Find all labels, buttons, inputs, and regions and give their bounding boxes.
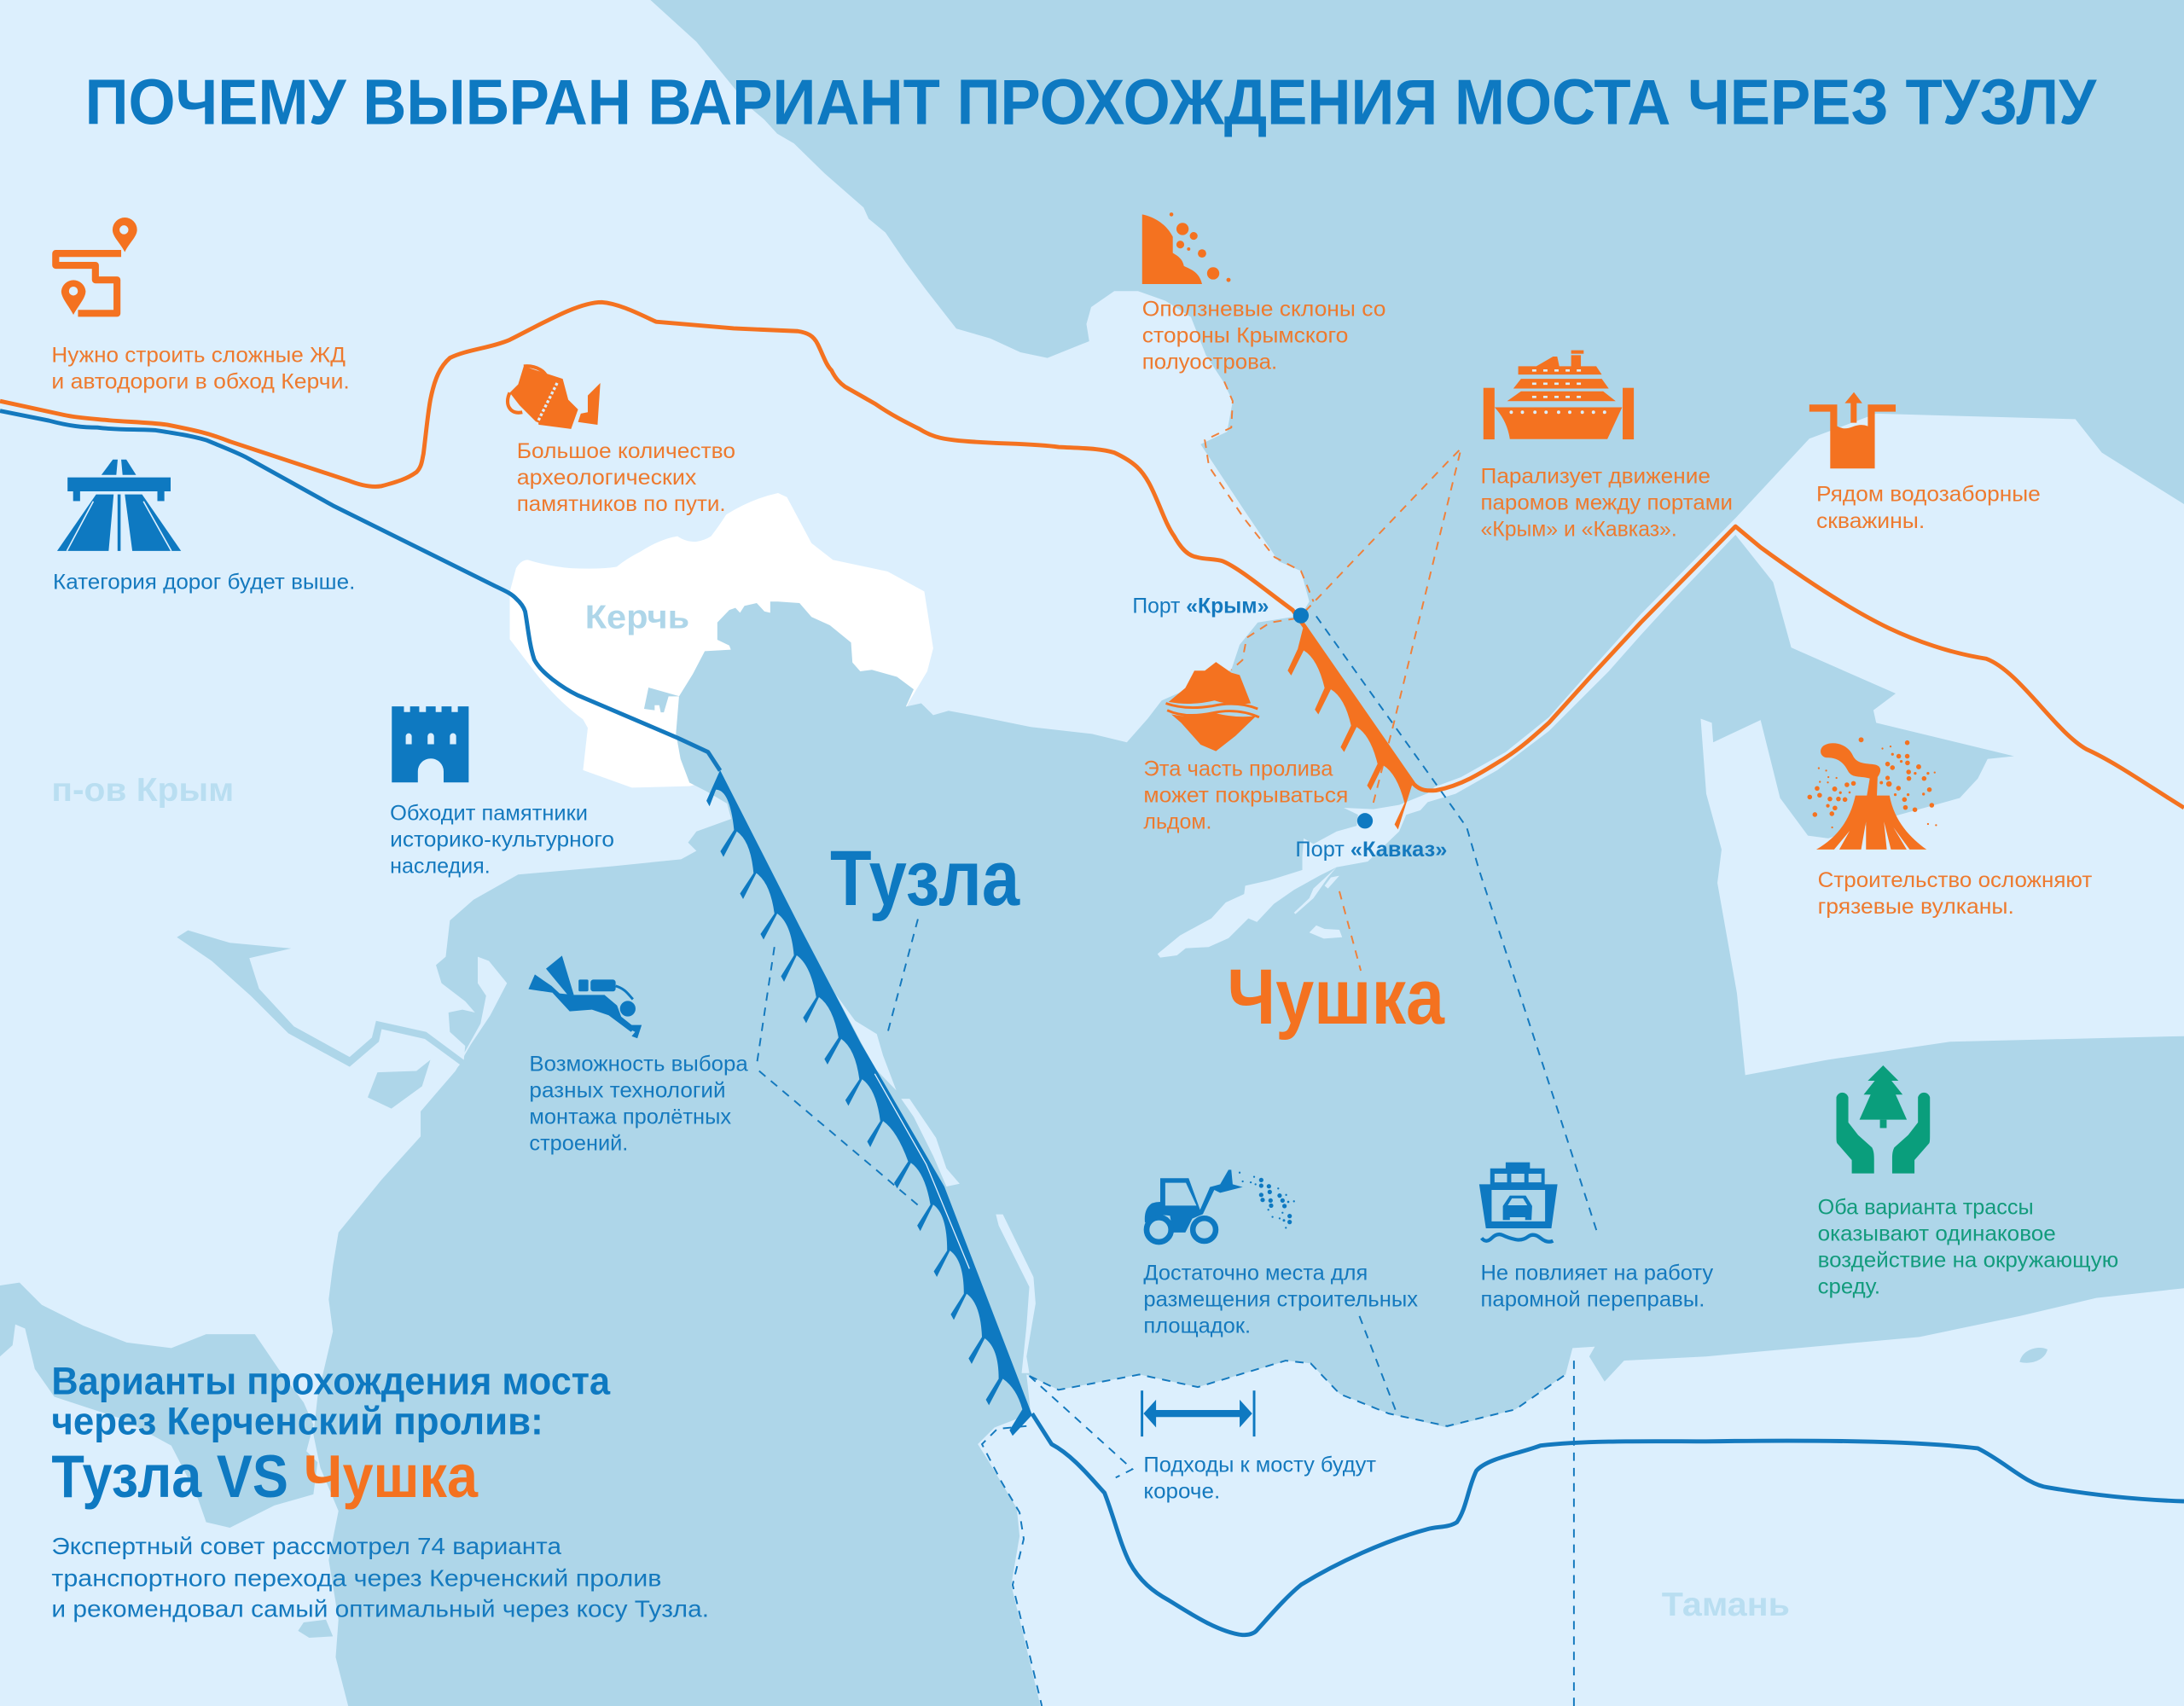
map: western lagoons [0,931,464,1638]
text: environment: оказывают одинаковое [1818,1222,2056,1246]
text: landslide: Оползневые склоны со [1142,298,1385,322]
text: heritage: Обходит памятники [390,802,588,826]
text: ice: Эта часть пролива [1143,757,1333,780]
text: complex roads: и автодороги в обход Керчи. [51,370,350,394]
text: landslide: стороны Крымского [1142,324,1348,348]
text: expert council: и рекомендовал самый оптимальный через косу Тузла. [51,1596,709,1622]
text: ferry crossing [1481,1261,1714,1311]
text: wells: Рядом водозаборные [1816,483,2041,507]
text: heritage [390,802,614,879]
icon: castle [392,706,468,782]
text: expert council [51,1533,709,1622]
text: approaches: Подходы к мосту будут [1143,1454,1376,1477]
text: diving technologies: монтажа пролётных [529,1105,731,1129]
text: environment: среду. [1818,1275,1880,1299]
text: ice [1143,757,1348,833]
port dots [1293,607,1373,828]
map: spits near Tuzla and Crimea [397,957,1036,1373]
text: ferry crossing: паромной переправы. [1481,1287,1705,1311]
text: landslide [1142,298,1385,374]
icon: hands and tree [1836,1065,1930,1174]
text: diving technologies: разных технологий [529,1079,726,1103]
text: archaeology: памятников по пути. [517,492,726,516]
text: diving technologies [529,1053,749,1156]
text: ferries: «Крым» и «Кавказ». [1481,518,1677,542]
text: ice: может покрываться [1143,783,1348,807]
label: Chushka: Чушка [1227,954,1445,1041]
text: construction sites [1143,1261,1418,1338]
text: construction sites: Достаточно места для [1143,1261,1368,1285]
text: road category: Категория дорог будет выше. [53,571,355,595]
text: ice: льдом. [1143,809,1211,833]
text: landslide: полуострова. [1142,351,1277,374]
text: diving technologies: Возможность выбора [529,1053,749,1076]
map: Kerch port basin [644,688,680,712]
icon: mud volcano [1808,737,1937,850]
icon: car ferry [1479,1163,1558,1242]
text: archaeology [517,439,735,516]
label: port Krym: Порт «Крым» [1132,594,1269,618]
label: Taman: Тамань [1662,1587,1790,1623]
text: approaches: короче. [1143,1480,1220,1504]
icon: highway [57,460,181,551]
text: heritage: наследия. [390,855,491,879]
text: environment: воздействие на окружающую [1818,1249,2118,1273]
heading: Tuzla VS Chushka: Тузла VS [51,1442,288,1510]
heading: bridge options: Варианты прохождения моста [51,1359,611,1402]
label: Tuzla: Тузла [830,835,1020,922]
map: small sea inlet on Taman coast [2019,1348,2048,1363]
icon: diver [528,955,642,1038]
text: construction sites: размещения строительных [1143,1287,1418,1311]
heading: Tuzla VS Chushka [51,1442,479,1510]
map: Taman north land and Chushka spit [1158,414,2184,1075]
text: ferry crossing: Не повлияет на работу [1481,1261,1714,1285]
text: wells: скважины. [1816,509,1925,533]
text: mud volcanoes [1818,868,2093,919]
text: expert council: транспортного перехода через Керченский пролив [51,1565,662,1592]
text: ferries: паромов между портами [1481,491,1733,515]
text: archaeology: Большое количество [517,439,735,463]
Tuzla bridge [706,770,1032,1436]
dashed leader lines [757,381,1598,1706]
Chushka bridge [1287,625,1413,829]
icon: iceberg [1166,662,1259,751]
text: mud volcanoes: грязевые вулканы. [1818,895,2014,919]
heading: Tuzla VS Chushka: Чушка [304,1442,479,1510]
text: heritage: историко-культурного [390,828,614,852]
icon: width arrow [1141,1390,1256,1436]
text: expert council: Экспертный совет рассмотрел 74 варианта [51,1533,562,1559]
blue route: Tuzla variant [0,411,2184,1635]
text: construction sites: площадок. [1143,1314,1251,1338]
text: mud volcanoes: Строительство осложняют [1818,868,2093,892]
icon: cruise ship [1484,351,1634,439]
text: archaeology: археологических [517,466,697,490]
icon: route with pins [55,218,137,315]
icon: landslide [1142,212,1230,284]
heading: bridge options: через Керченский пролив: [51,1400,543,1443]
heading: bridge options [51,1359,611,1443]
text: approaches [1143,1454,1376,1504]
map: Taman south land [978,1288,2184,1706]
text: complex roads [51,343,350,394]
text: ferries: Парализует движение [1481,465,1711,489]
text: ferries [1481,465,1733,542]
icon: tractor [1145,1169,1295,1242]
text: environment [1818,1196,2118,1299]
icon: water well [1809,392,1896,468]
orange route: Chushka variant [0,302,2184,808]
text: complex roads: Нужно строить сложные ЖД [51,343,346,367]
map: Chushka slivers [1294,868,1342,938]
label: Kerch: Керчь [585,599,689,635]
label: Crimea: п-ов Крым [51,772,234,809]
map: Kerch city area [510,493,933,787]
text: diving technologies: строений. [529,1132,628,1156]
icon: amphora [508,366,601,429]
title: ПОЧЕМУ ВЫБРАН ВАРИАНТ ПРОХОЖДЕНИЯ МОСТА ЧЕРЕЗ ТУЗЛУ [85,66,2097,137]
text: environment: Оба варианта трассы [1818,1196,2034,1220]
text: wells [1816,483,2041,533]
label: port Kavkaz: Порт «Кавказ» [1295,838,1447,862]
